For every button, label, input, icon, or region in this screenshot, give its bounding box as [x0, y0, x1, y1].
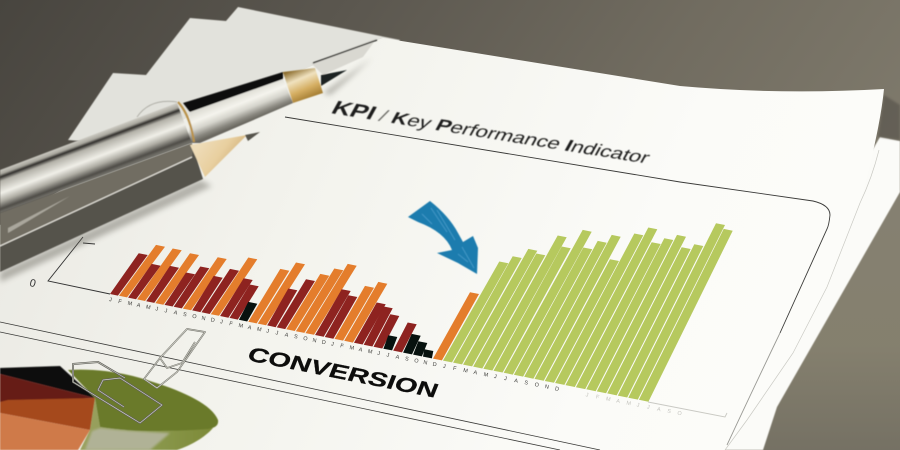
section title: CONVERSION: CONVERSION: [244, 343, 442, 402]
pencil wood tip: [190, 135, 247, 177]
pen gold ring: [283, 68, 323, 103]
pie black slice: [0, 366, 95, 398]
chart frame: [285, 117, 830, 445]
axis label zero: 0: [28, 277, 37, 290]
shadow under pencil and nib: [0, 58, 372, 282]
pencil lead: [245, 132, 260, 141]
heading: KPI / Key Performance Indicator: KPI / Key Performance Indicator: [328, 97, 655, 167]
chart axes: [48, 237, 727, 417]
pie chart: [0, 366, 218, 450]
pie green slice: [68, 370, 218, 450]
icon: pencil: [0, 132, 260, 272]
icon: upper paper clip: [144, 329, 205, 388]
pie brown slice: [0, 398, 95, 430]
icon: lower paper clip: [73, 362, 162, 423]
pen cap: [0, 103, 192, 213]
month labels along the axis: [108, 297, 683, 417]
pie orange slice: [0, 413, 90, 450]
bars after the change: green: [443, 223, 733, 402]
icon: fountain pen: [0, 38, 377, 213]
icon: blue hand-drawn arrow: [408, 201, 478, 274]
sheet edge line: [725, 150, 879, 450]
pen clip loop: [137, 101, 177, 117]
pie red slice: [0, 374, 95, 402]
month labels along the axis: JFMAMJJASO: [585, 392, 683, 417]
double divider lines: [0, 322, 600, 450]
pen body: [183, 72, 293, 143]
pencil body: [0, 147, 203, 272]
bars before the change: red, orange, black: [110, 245, 479, 360]
shadow of top sheet on desk: [878, 95, 900, 140]
bar chart: monthly conversion: [110, 223, 733, 402]
pen nib: [311, 38, 377, 86]
pen gold band: [178, 102, 194, 142]
month labels along the axis: JFMAMJJASONDJFMAMJJASONDJFMAMJJASONDJFMAMJJASOND: [108, 297, 559, 393]
